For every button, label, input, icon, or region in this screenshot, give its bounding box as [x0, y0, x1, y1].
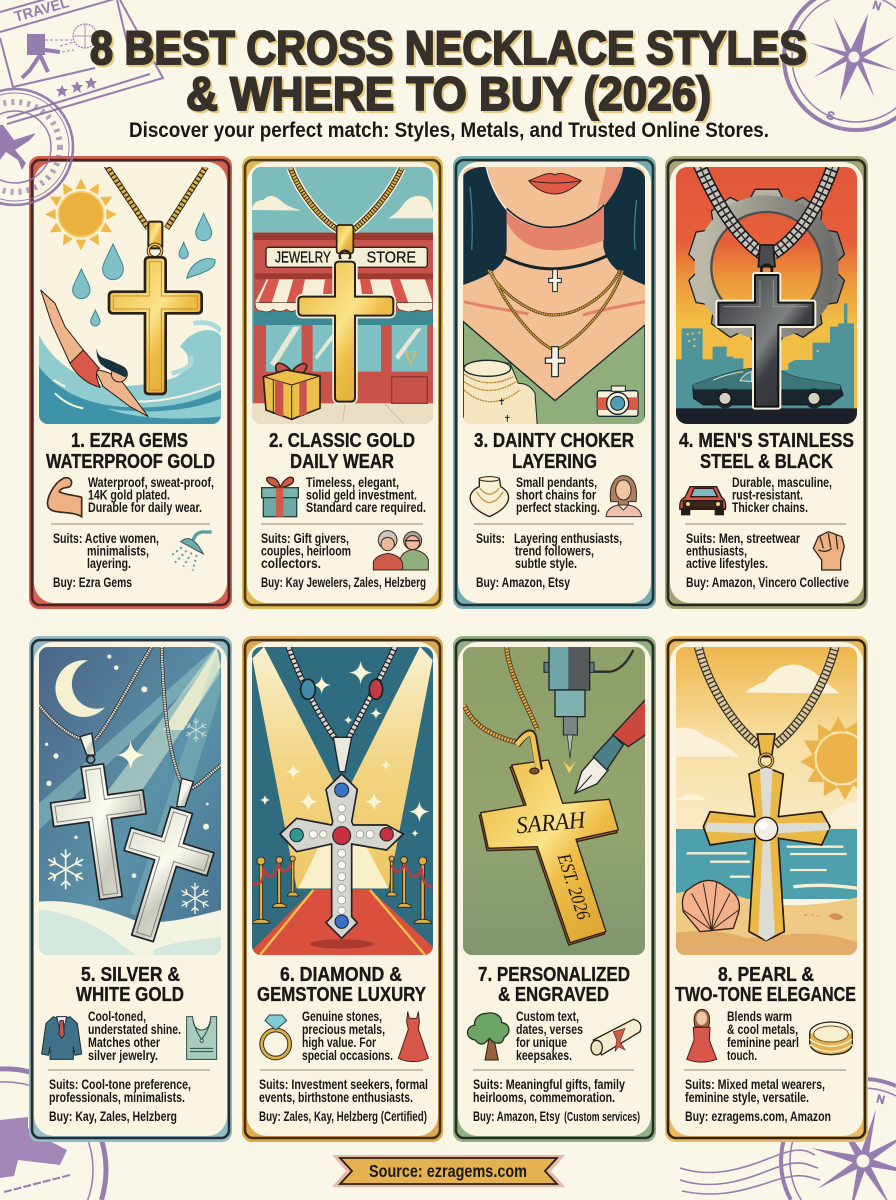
description: for unique [516, 1034, 567, 1050]
subtitle: Discover your perfect match: Styles, Metals, and Trusted Online Stores. [129, 119, 769, 142]
illustration: woman wearing layered chains [460, 163, 650, 427]
heading: STEEL & BLACK [700, 451, 833, 473]
icon: necklace bust [470, 477, 509, 517]
illustration: steel cross, gear and city [673, 163, 860, 427]
card frame [242, 636, 443, 1142]
heading [269, 430, 415, 473]
panel: card 1 Ezra Gems [29, 156, 232, 609]
panel: card 3 Dainty Choker [453, 156, 656, 609]
icon: raised fist [813, 532, 844, 570]
description [516, 474, 600, 515]
description: Thicker chains. [732, 499, 808, 515]
description [302, 1008, 393, 1063]
stamp: compass bottom right [680, 1079, 896, 1200]
suits text: Suits: Cool-tone preference, [49, 1076, 191, 1092]
suits text: events, birthstone enthusiasts. [259, 1089, 413, 1105]
source banner [332, 1155, 565, 1187]
icon: woman in red gown [687, 1009, 717, 1062]
description: & cool metals, [727, 1021, 798, 1037]
description: short chains for [516, 486, 596, 502]
heading: 4. MEN'S STAINLESS [679, 430, 854, 452]
heading: LAYERING [512, 451, 597, 473]
description: Durable, masculine, [732, 474, 832, 490]
illustration: swimmer and gold cross [37, 163, 223, 427]
suits text [686, 530, 800, 571]
description: special occasions. [302, 1047, 393, 1063]
icon: diamond ring [262, 1015, 290, 1058]
icon: woman portrait [606, 476, 642, 517]
illustration: jewelry store and gold cross: JEWELRY [275, 250, 331, 267]
icon: suit jacket [42, 1017, 82, 1059]
suits text [261, 530, 351, 571]
suits text: active lifestyles. [686, 555, 768, 571]
description [88, 1008, 181, 1063]
cross [479, 763, 617, 945]
suits text: feminine style, versatile. [685, 1089, 809, 1105]
heading [679, 430, 854, 473]
suits text: Layering enthusiasts, [514, 530, 622, 546]
suits text: Suits: Investment seekers, formal [259, 1076, 428, 1092]
heading: 7. PERSONALIZED [478, 964, 630, 986]
suits text: minimalists, [87, 542, 149, 558]
panel: card 5 Silver and White Gold [29, 636, 232, 1142]
icon: elderly couple [373, 531, 428, 570]
heading: & ENGRAVED [498, 984, 609, 1006]
stamp: round airmail [0, 89, 73, 205]
stamp: bottom left [0, 1069, 106, 1200]
description: Standard care required. [306, 499, 426, 515]
card frame [453, 156, 656, 609]
description: 14K gold plated. [88, 486, 170, 502]
heading: 3. DAINTY CHOKER [474, 430, 634, 452]
description: Custom text, [516, 1008, 579, 1024]
suits text: Suits: Gift givers, [261, 530, 349, 546]
icon: shower head [170, 532, 212, 571]
suits text: collectors. [261, 555, 321, 571]
buy text: Buy: Amazon, Etsy [473, 1108, 560, 1124]
suits text: subtle style. [515, 555, 577, 571]
stamp: compass top right: S [825, 109, 836, 123]
icon: family tree [467, 1013, 509, 1060]
icon: stacked rings [810, 1022, 852, 1055]
stamp: compass top right [784, 0, 896, 130]
camera [597, 391, 638, 416]
description: understated shine. [88, 1021, 181, 1037]
description: feminine pearl [727, 1034, 799, 1050]
suits text: Suits: Men, streetwear [686, 530, 800, 546]
source banner: Source: ezragems.com [369, 1161, 527, 1181]
illustration: engraved gold cross, engraver and pen: EST. 2026 [552, 850, 594, 923]
title: 8 BEST CROSS NECKLACE STYLES [90, 21, 807, 74]
description: Small pendants, [516, 474, 597, 490]
icon: scroll [591, 1019, 641, 1055]
illustration: two silver crosses at night [37, 643, 223, 958]
suits text: Suits: Meaningful gifts, family [473, 1076, 625, 1092]
heading [46, 430, 215, 473]
description: dates, verses [516, 1021, 583, 1037]
description: Matches other [88, 1034, 160, 1050]
buy text: Buy: Kay Jewelers, Zales, Helzberg [261, 574, 426, 590]
swimmer [41, 290, 148, 417]
heading [474, 430, 634, 473]
suits text: Suits: Active women, [53, 530, 159, 546]
description: Cool-toned, [88, 1008, 146, 1024]
heading: 1. EZRA GEMS [71, 430, 188, 452]
pen [575, 757, 608, 793]
buy text: (Custom services) [564, 1110, 640, 1124]
card frame [665, 156, 868, 609]
heading: GEMSTONE LUXURY [257, 984, 427, 1006]
description: Durable for daily wear. [88, 499, 202, 515]
stamp: travel passport [0, 0, 163, 124]
description: touch. [727, 1047, 757, 1063]
heading [76, 964, 184, 1006]
icon: tank top with necklace [187, 1017, 217, 1059]
description: high value. For [302, 1034, 376, 1050]
description: solid geld investment. [306, 486, 417, 502]
title [90, 21, 807, 120]
card frame [665, 636, 868, 1142]
stamp: compass bottom right: N [875, 1093, 886, 1107]
illustration: jewelry store and gold cross: STORE [367, 250, 416, 267]
description [732, 474, 832, 515]
suits text: layering. [87, 555, 131, 571]
card frame [242, 156, 443, 609]
heading: 8. PEARL & [718, 964, 814, 986]
suits text: Suits: Mixed metal wearers, [685, 1076, 825, 1092]
card frame [453, 636, 656, 1142]
illustration: jewelry store and gold cross [250, 163, 435, 427]
heading [257, 964, 427, 1006]
suits text: enthusiasts, [686, 542, 747, 558]
heading [478, 964, 630, 1006]
heading: DAILY WEAR [290, 451, 394, 473]
panel: card 2 Classic Gold [242, 156, 443, 609]
heading: 2. CLASSIC GOLD [269, 430, 415, 452]
description: perfect stacking. [516, 499, 600, 515]
buy text: Buy: Zales, Kay, Helzberg (Certified) [259, 1108, 427, 1124]
description [516, 1008, 583, 1063]
suits text: trend followers, [515, 542, 594, 558]
description: Genuine stones, [302, 1008, 382, 1024]
description: precious metals, [302, 1021, 385, 1037]
icon: flexed bicep [48, 478, 82, 517]
description [88, 474, 214, 515]
card frame [29, 156, 232, 609]
heading [675, 964, 856, 1006]
icon: gift box [262, 477, 298, 517]
description: silver jewelry. [88, 1047, 158, 1063]
illustration: jeweled cross on red carpet [250, 643, 435, 958]
panel: card 6 Diamond and Gemstone [242, 636, 443, 1142]
buy text: Buy: Amazon, Etsy [476, 574, 570, 590]
heading: WATERPROOF GOLD [46, 451, 215, 473]
suits text: Suits: [476, 530, 505, 546]
buy text: Buy: ezragems.com, Amazon [685, 1108, 831, 1124]
illustration: engraved gold cross, engraver and pen: SARAH [515, 807, 588, 839]
suits text: professionals, minimalists. [49, 1089, 185, 1105]
description: rust-resistant. [732, 486, 803, 502]
card frame [29, 636, 232, 1142]
gift box [274, 362, 308, 372]
title: & WHERE TO BUY (2026) [186, 67, 711, 120]
panel: card 7 Personalized [453, 636, 656, 1142]
description [306, 474, 426, 515]
description [727, 1008, 799, 1063]
panel: card 4 Men's Stainless [665, 156, 868, 609]
heading: WHITE GOLD [76, 984, 184, 1006]
description: keepsakes. [516, 1047, 572, 1063]
illustration: two-tone pearl cross at beach [676, 647, 857, 955]
engraver [593, 650, 633, 672]
panel: card 8 Pearl and Two-Tone [665, 636, 873, 1142]
buy text: Buy: Kay, Zales, Helzberg [49, 1108, 177, 1124]
suits text [53, 530, 159, 571]
icon: muscle car front [680, 487, 726, 515]
icon: red dress [398, 1012, 428, 1062]
description: Blends warm [727, 1008, 792, 1024]
description: Waterproof, sweat-proof, [88, 474, 214, 490]
heading: 5. SILVER & [81, 964, 180, 986]
suits text: heirlooms, commemoration. [473, 1089, 615, 1105]
shell [682, 880, 739, 932]
suits text [259, 1076, 428, 1105]
description: Timeless, elegant, [306, 474, 399, 490]
illustration: engraved gold cross, engraver and pen [460, 643, 650, 958]
buy text: Buy: Ezra Gems [53, 574, 132, 590]
heading: 6. DIAMOND & [280, 964, 402, 986]
suits text [476, 530, 622, 571]
suits text [685, 1076, 825, 1105]
rope posts [252, 856, 432, 923]
suits text: couples, heirloom [261, 542, 351, 558]
suits text [473, 1076, 625, 1105]
suits text [49, 1076, 191, 1105]
heading: TWO-TONE ELEGANCE [675, 984, 856, 1006]
